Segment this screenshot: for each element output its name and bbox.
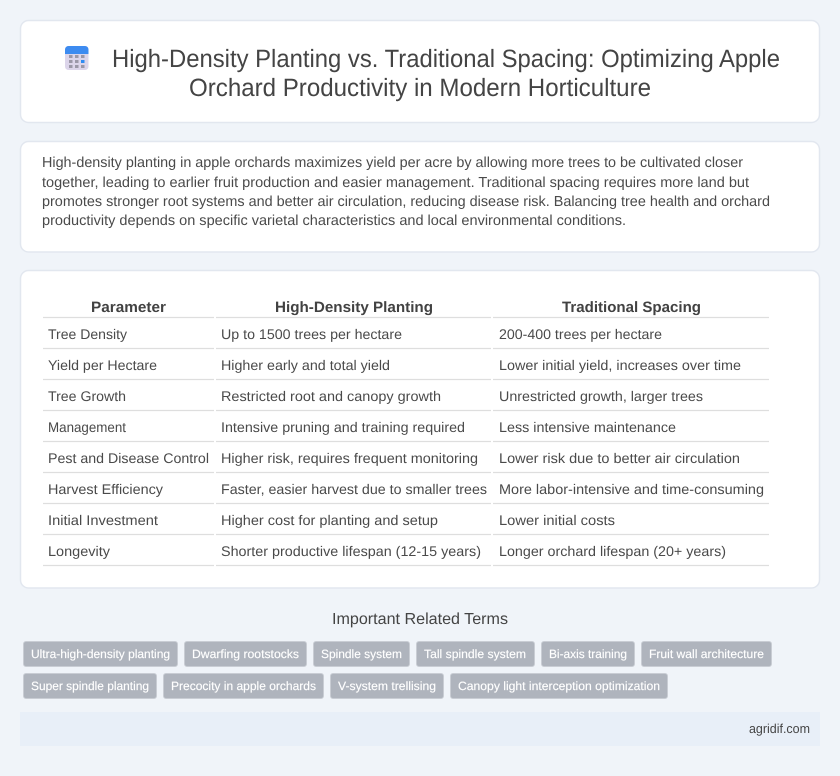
row: Longevity: Shorter productive lifespan (12-15 years) <box>221 543 481 559</box>
row: Harvest Efficiency: Faster, easier harvest due to smaller trees <box>221 481 487 497</box>
table header: Traditional Spacing <box>562 299 701 316</box>
title: High-Density Planting vs. Traditional Spacing: Optimizing Apple <box>112 45 780 73</box>
row: Longevity <box>43 543 769 566</box>
tags: related terms: Spindle system <box>321 647 402 661</box>
text block: summary paragraph: High-density planting in apple orchards maximizes yield per acre by allowing more trees to be cultivated closer <box>42 155 743 171</box>
panel: summary <box>20 142 820 252</box>
row: Tree Growth: Tree Growth <box>48 388 126 404</box>
tags: related terms <box>24 642 772 698</box>
row: Tree Growth: Unrestricted growth, larger trees <box>499 388 703 404</box>
row: Longevity: Longevity <box>48 543 110 559</box>
footer: agridif.com <box>749 721 810 736</box>
row: Yield per Hectare: Lower initial yield, increases over time <box>499 357 741 373</box>
tags: related terms: Canopy light interception optimization <box>458 679 660 693</box>
row: Tree Growth <box>43 388 769 410</box>
title <box>112 45 780 102</box>
row: Management: Intensive pruning and training required <box>221 419 465 435</box>
tags: related terms: Tall spindle system <box>424 647 526 661</box>
row: Management <box>43 419 769 442</box>
row: Yield per Hectare: Higher early and total yield <box>221 357 390 373</box>
row: Tree Growth: Restricted root and canopy growth <box>221 388 441 404</box>
row: Harvest Efficiency: More labor-intensive and time-consuming <box>499 481 764 497</box>
row: Harvest Efficiency <box>43 481 769 504</box>
tags: related terms: Dwarfing rootstocks <box>192 647 299 661</box>
text block: summary paragraph: productivity depends on specific varietal characteristics and local environmental conditions. <box>42 213 626 229</box>
table header: High-Density Planting <box>275 299 433 316</box>
row: Pest and Disease Control: Lower risk due to better air circulation <box>499 450 740 466</box>
tags: related terms: Ultra-high-density planting <box>31 647 170 661</box>
tags: related terms: Super spindle planting <box>31 679 149 693</box>
row: Initial Investment <box>43 512 769 534</box>
row: Harvest Efficiency: Harvest Efficiency <box>48 481 163 497</box>
row: Tree Density: 200-400 trees per hectare <box>499 326 662 342</box>
panel: header <box>20 20 820 122</box>
tags: related terms: V-system trellising <box>338 679 436 693</box>
row: Longevity: Longer orchard lifespan (20+ years) <box>499 543 726 559</box>
row: Management: Management <box>48 419 126 435</box>
row: Yield per Hectare: Yield per Hectare <box>48 357 157 373</box>
row: Pest and Disease Control <box>43 450 769 472</box>
row: Tree Density: Up to 1500 trees per hectare <box>221 326 402 342</box>
tags: related terms: Precocity in apple orchards <box>171 679 316 693</box>
row: Management: Less intensive maintenance <box>499 419 676 435</box>
row: Pest and Disease Control: Pest and Disease Control <box>48 450 209 466</box>
row: Yield per Hectare <box>43 357 769 380</box>
row: Initial Investment: Higher cost for planting and setup <box>221 512 438 528</box>
panel: comparison table <box>20 270 820 588</box>
footer <box>20 712 820 746</box>
tags: related terms: Bi-axis training <box>549 647 627 661</box>
text block: summary paragraph: promotes stronger root systems and better air circulation, reducing disease risk. Balancing tree health and orchard <box>42 194 770 210</box>
tags: related terms: Fruit wall architecture <box>649 647 764 661</box>
row: Tree Density <box>43 326 769 348</box>
row: Initial Investment: Lower initial costs <box>499 512 615 528</box>
row: Initial Investment: Initial Investment <box>48 512 158 528</box>
text block: summary paragraph <box>42 155 770 229</box>
table header <box>43 299 769 318</box>
row: Pest and Disease Control: Higher risk, requires frequent monitoring <box>221 450 478 466</box>
text block: summary paragraph: together, leading to earlier fruit production and easier management. Traditional spacing requires more land but <box>42 175 749 191</box>
row: Tree Density: Tree Density <box>48 326 127 342</box>
table header: Parameter <box>91 299 166 316</box>
icon: calendar <box>65 46 88 70</box>
heading: related terms: Important Related Terms <box>332 611 508 628</box>
title: Orchard Productivity in Modern Horticulture <box>189 74 651 102</box>
